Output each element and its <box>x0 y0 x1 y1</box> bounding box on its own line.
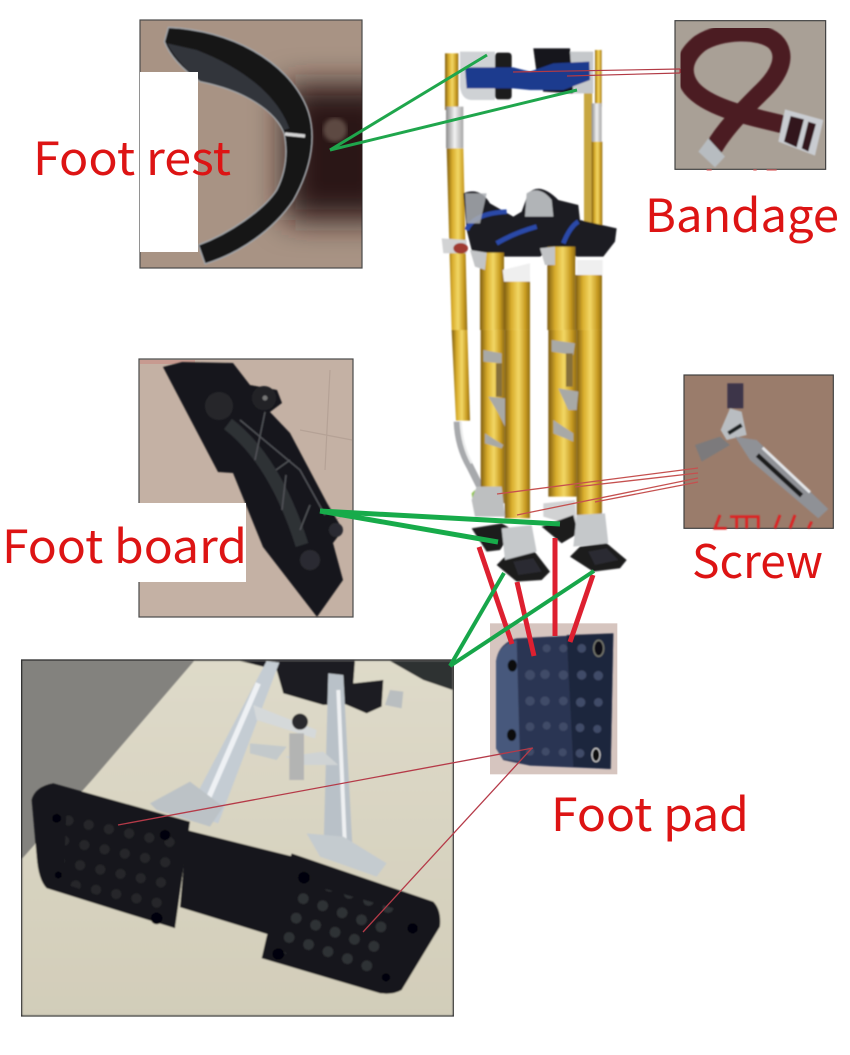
arrow: foot pad thick red lines <box>479 538 593 656</box>
heading: Foot rest: Foot rest <box>33 123 231 189</box>
chart: main stilts product <box>442 48 627 582</box>
icon: foot brackets and plates <box>472 487 627 582</box>
icon: rubber foot pad <box>496 633 613 769</box>
arrow: screw callout lines <box>497 468 698 515</box>
icon: left foot pad <box>32 783 190 928</box>
arrow: foot rest callout lines <box>330 55 577 150</box>
icon: foot board <box>163 362 343 617</box>
panel: foot board photo <box>0 359 353 617</box>
icon: right outer pole <box>584 50 602 225</box>
arrow: bandage callout lines <box>513 69 680 76</box>
upper stilt section <box>442 48 617 330</box>
heading: Foot pad: Foot pad <box>551 779 749 845</box>
icon: inner gold tubes lower <box>481 330 602 518</box>
heading: Screw: Screw <box>692 526 823 592</box>
icon: lower foot straps and buckles <box>463 189 617 257</box>
lower stilt section <box>452 330 627 582</box>
arrow: foot board callout lines <box>320 511 560 542</box>
icon: spring mechanisms <box>483 340 578 448</box>
icon: metal buckle <box>698 109 823 167</box>
icon: center plate <box>180 830 293 935</box>
icon: maroon strap <box>685 32 785 152</box>
heading: Bandage: Bandage <box>645 180 839 246</box>
icon: stilt frame <box>150 661 403 877</box>
icon: top foot cuffs and blue strap <box>460 48 593 100</box>
icon: left outer pole lower <box>452 330 480 505</box>
icon: left outer pole <box>445 53 467 330</box>
icon: right foot pad <box>262 853 440 994</box>
icon: screw assembly <box>695 383 828 518</box>
red edge marks <box>707 168 777 172</box>
icon: curved foot rest <box>164 27 312 264</box>
panel: foot rest photo <box>139 19 363 269</box>
panel: stilts on pad photo <box>22 660 453 1016</box>
heading: Foot board: Foot board <box>2 511 247 577</box>
panel: foot pad photo <box>490 623 617 774</box>
icon: red strap clip <box>442 238 468 254</box>
panel: screw photo <box>684 375 833 528</box>
arrow: foot pad thin red lines <box>118 748 533 932</box>
panel: bandage photo <box>675 21 826 170</box>
icon: inner gold tubes upper <box>470 247 603 330</box>
red text fragments <box>715 515 812 528</box>
arrow: foot pad green lines <box>450 571 594 666</box>
